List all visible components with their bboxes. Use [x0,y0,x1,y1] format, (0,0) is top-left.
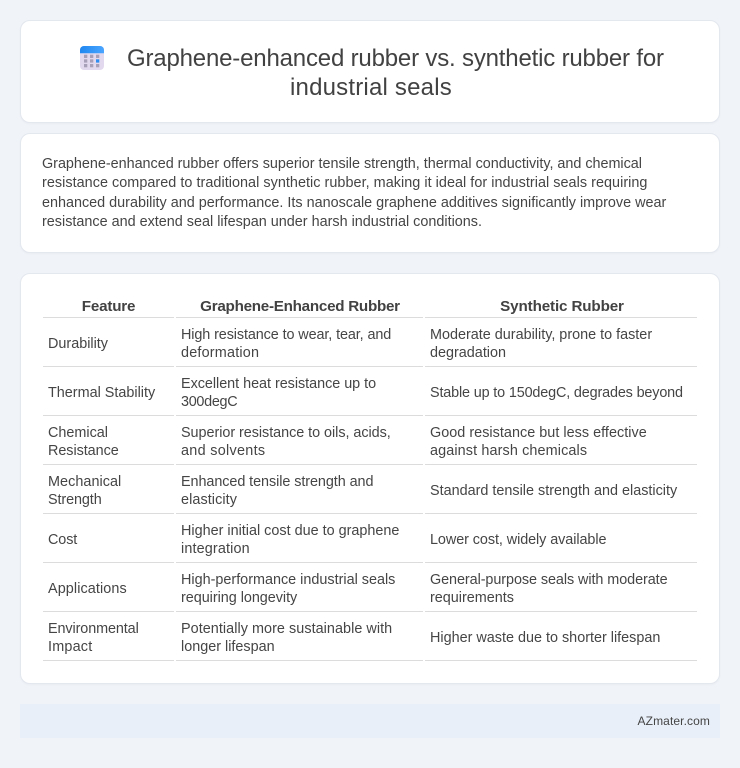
row: durability: Durability [48,336,108,352]
row: cost: integration [181,541,250,557]
row: environmental impact [43,621,697,661]
row: applications: requirements [430,590,514,606]
row: mechanical strength [43,474,697,514]
row: environmental impact: Higher waste due to shorter lifespan [430,630,660,646]
row: mechanical strength: Enhanced tensile strength and [181,474,373,490]
panel: comparison table [20,273,720,684]
panel: summary [20,133,720,253]
row: environmental impact: longer lifespan [181,639,275,655]
header: synthetic rubber: Synthetic Rubber [500,298,624,315]
title: Graphene-enhanced rubber vs. synthetic rubber for [127,45,664,72]
row: thermal stability: Excellent heat resistance up to [181,376,376,392]
icon: calendar [80,46,104,70]
row: chemical resistance: against harsh chemicals [430,443,587,459]
row: thermal stability: 300degC [181,394,237,410]
summary text: resistance compared to traditional synthetic rubber, making it ideal for industrial seals requiring [42,175,647,191]
row: cost: Cost [48,532,77,548]
summary text: resistance and extend seal lifespan under harsh industrial conditions. [42,214,482,230]
row: environmental impact: Environmental [48,621,139,637]
row: applications: General-purpose seals with moderate [430,572,668,588]
row: chemical resistance: Chemical [48,425,108,441]
row: applications: Applications [48,581,127,597]
row: durability [43,327,697,367]
row: durability: degradation [430,345,506,361]
row: durability: deformation [181,345,259,361]
table header [43,298,697,318]
row: durability: High resistance to wear, tear, and [181,327,391,343]
header: graphene-enhanced rubber: Graphene-Enhanced Rubber [200,298,400,315]
row: cost [43,523,697,563]
row: cost: Lower cost, widely available [430,532,606,548]
row: applications: High-performance industrial seals [181,572,395,588]
row: environmental impact: Potentially more sustainable with [181,621,392,637]
row: thermal stability: Stable up to 150degC, degrades beyond [430,385,683,401]
row: applications [43,572,697,612]
row: chemical resistance: Superior resistance to oils, acids, [181,425,391,441]
row: thermal stability: Thermal Stability [48,385,155,401]
row: mechanical strength: Standard tensile strength and elasticity [430,483,677,499]
footer bar [20,704,720,738]
row: thermal stability [43,376,697,416]
row: cost: Higher initial cost due to graphene [181,523,399,539]
title [127,45,664,101]
summary text: enhanced durability and performance. Its nanoscale graphene additives significantly improve wear [42,195,666,211]
row: environmental impact: Impact [48,639,92,655]
header: feature: Feature [82,298,135,315]
row: mechanical strength: Strength [48,492,102,508]
summary text: Graphene-enhanced rubber offers superior tensile strength, thermal conductivity, and chemical [42,156,642,172]
row: mechanical strength: Mechanical [48,474,121,490]
row: chemical resistance [43,425,697,465]
row: applications: requiring longevity [181,590,297,606]
panel: title card [20,20,720,123]
row: mechanical strength: elasticity [181,492,237,508]
row: chemical resistance: Good resistance but less effective [430,425,647,441]
row: durability: Moderate durability, prone to faster [430,327,652,343]
title: industrial seals [290,74,452,101]
footer source: AZmater.com [638,714,710,728]
summary text [42,156,666,230]
row: chemical resistance: Resistance [48,443,119,459]
row: chemical resistance: and solvents [181,443,265,459]
